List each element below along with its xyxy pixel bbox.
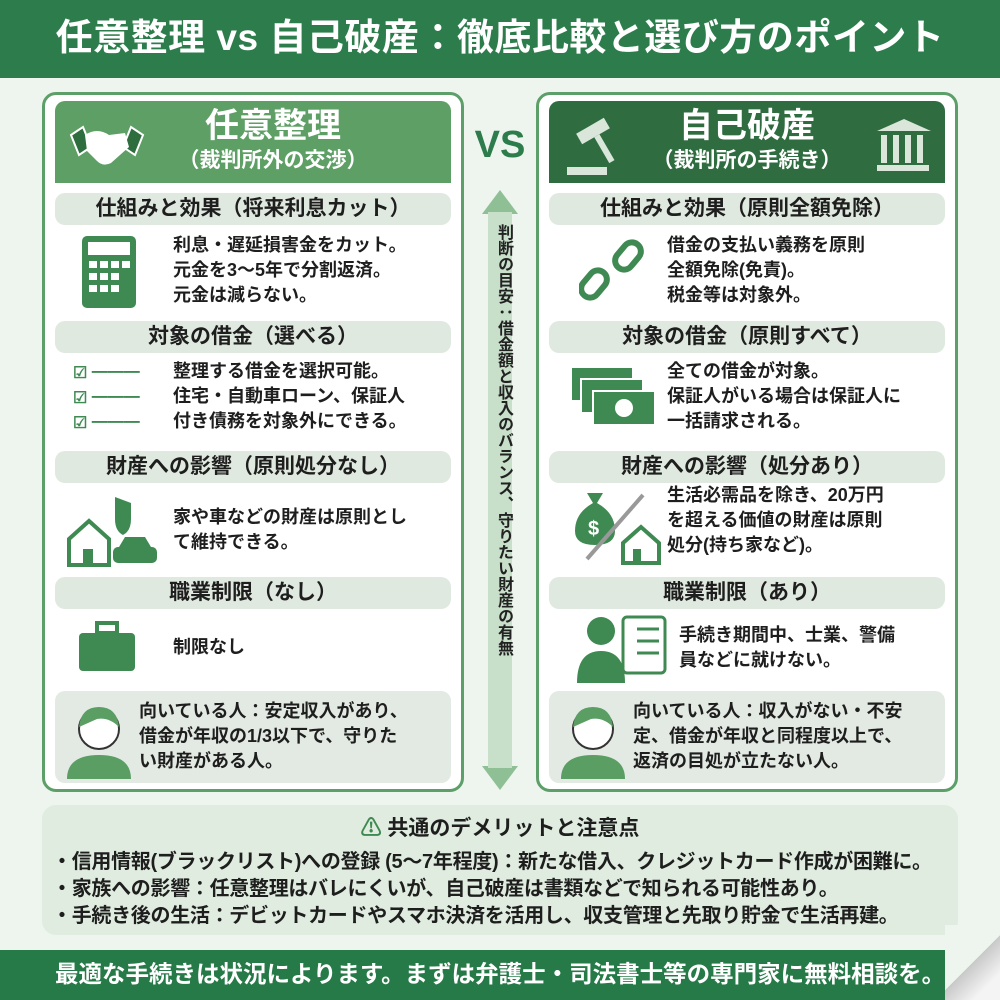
panel: 自己破産 — [536, 92, 958, 792]
icon: checklist: ☑ ━━━ — [73, 365, 140, 382]
icon: broken chain — [579, 239, 644, 301]
text: 財産: て維持できる。 — [173, 532, 299, 552]
text — [667, 361, 901, 431]
text: 全ての借金が対象。 — [667, 361, 829, 381]
section: 財産 — [549, 451, 945, 483]
text: 全額免除(免責)。 — [667, 260, 805, 280]
text: 一括請求される。 — [667, 411, 811, 431]
section: 仕組みと効果 — [55, 193, 451, 225]
panel header right — [549, 101, 945, 183]
icon: money bag & house: $ — [588, 518, 599, 540]
text — [667, 235, 865, 305]
section: 財産: 財産への影響（原則処分なし） — [106, 455, 400, 478]
icon: checklist: ☑ ━━━ — [73, 390, 140, 407]
text: 対象: 住宅・自動車ローン、保証人 — [173, 386, 405, 406]
text: 保証人がいる場合は保証人に — [667, 386, 901, 406]
bullet list — [52, 850, 932, 927]
text: 手続き期間中、士業、警備 — [679, 625, 895, 645]
text: 財産: 家や車などの財産は原則とし — [173, 507, 407, 527]
section: 対象の借金 — [549, 321, 945, 353]
section: 仕組みと効果: 仕組みと効果（将来利息カット） — [96, 197, 410, 220]
icon: smiling person — [67, 707, 131, 779]
panel header left: （裁判所外の交渉） — [178, 149, 368, 172]
icon: house car shield — [67, 497, 157, 567]
panel header left — [55, 101, 451, 183]
section: 職業制限: 職業制限（なし） — [169, 581, 337, 604]
text: 員などに就けない。 — [679, 650, 841, 670]
text: 借金の支払い義務を原則 — [667, 235, 865, 255]
panel header right: （裁判所の手続き） — [652, 149, 842, 172]
text: 仕組み: 利息・遅延損害金をカット。 — [173, 235, 407, 255]
text — [679, 625, 895, 670]
box: 向いている人 — [55, 691, 451, 783]
bullet list: ・家族への影響：任意整理はバレにくいが、自己破産は書類などで知られる可能性あり。 — [52, 878, 838, 900]
heading with warning icon: ⚠ 共通のデメリットと注意点 — [361, 817, 639, 840]
section: 職業制限 — [55, 577, 451, 609]
icon: gavel — [567, 118, 614, 175]
icon: bills — [572, 368, 654, 424]
icon: checklist — [73, 365, 140, 432]
text: を超える価値の財産は原則 — [667, 510, 882, 530]
bullet list: ・信用情報(ブラックリスト)への登録 (5〜7年程度)：新たな借入、クレジットカード作成が困難に。 — [52, 851, 932, 873]
text: 対象 — [173, 361, 407, 431]
section: 財産 — [55, 451, 451, 483]
icon: calculator — [82, 236, 136, 308]
text: 財産 — [173, 507, 407, 552]
text — [633, 701, 902, 771]
box: 向いている人 — [549, 691, 945, 783]
title — [0, 0, 1000, 78]
text: 職業: 制限なし — [173, 637, 245, 657]
section: 職業制限 — [549, 577, 945, 609]
text: 定、借金が年収と同程度以上で、 — [633, 726, 902, 746]
text: 向いている人：収入がない・不安 — [633, 701, 902, 721]
panel header left: 任意整理 — [205, 107, 341, 145]
section: 職業制限: 職業制限（あり） — [663, 581, 831, 604]
footer — [0, 950, 1000, 1000]
panel header right: 自己破産 — [679, 107, 815, 145]
panel: 任意整理 — [42, 92, 464, 792]
icon: money bag & house — [575, 493, 661, 565]
arrow: judgment axis: 判断の目安：借金額と収入のバランス、守りたい財産の有無 — [495, 224, 512, 656]
text: 仕組み: 元金を3〜5年で分割返済。 — [173, 260, 391, 280]
icon: worried person — [561, 707, 625, 779]
section: 対象の借金: 対象の借金（原則すべて） — [622, 325, 872, 348]
bullet list: ・手続き後の生活：デビットカードやスマホ決済を活用し、収支管理と先取り貯金で生活再建。 — [52, 905, 898, 927]
icon: briefcase — [79, 621, 135, 671]
title: 任意整理 vs 自己破産：徹底比較と選び方のポイント — [56, 17, 944, 58]
section: 対象の借金: 対象の借金（選べる） — [148, 325, 358, 348]
section: 仕組みと効果 — [549, 193, 945, 225]
text: 対象: 付き債務を対象外にできる。 — [173, 411, 407, 431]
text — [139, 701, 408, 771]
text: 生活必需品を除き、20万円 — [667, 485, 884, 505]
text: 仕組み: 元金は減らない。 — [173, 285, 317, 305]
arrow: judgment axis — [482, 190, 518, 790]
panel: common notes — [42, 805, 958, 935]
page curl — [945, 925, 1000, 1000]
icon: courthouse — [877, 119, 931, 171]
icon: handshake — [70, 126, 144, 165]
text: 借金が年収の1/3以下で、守りた — [139, 726, 397, 746]
text: 仕組み — [173, 235, 407, 305]
text: 対象: 整理する借金を選択可能。 — [173, 361, 389, 381]
text: 返済の目処が立たない人。 — [633, 751, 849, 771]
text: 向いている人：安定収入があり、 — [139, 701, 408, 721]
section: 対象の借金 — [55, 321, 451, 353]
VS: VS — [475, 124, 525, 166]
footer: 最適な手続きは状況によります。まずは弁護士・司法書士等の専門家に無料相談を。 — [55, 961, 945, 987]
icon: checklist: ☑ ━━━ — [73, 415, 140, 432]
text: 処分(持ち家など)。 — [667, 535, 823, 555]
section: 仕組みと効果: 仕組みと効果（原則全額免除） — [600, 197, 894, 220]
section: 財産: 財産への影響（処分あり） — [621, 455, 873, 478]
text: 税金等は対象外。 — [667, 285, 811, 305]
icon: person with checklist — [577, 616, 666, 683]
text: い財産がある人。 — [139, 751, 283, 771]
text — [667, 485, 884, 555]
